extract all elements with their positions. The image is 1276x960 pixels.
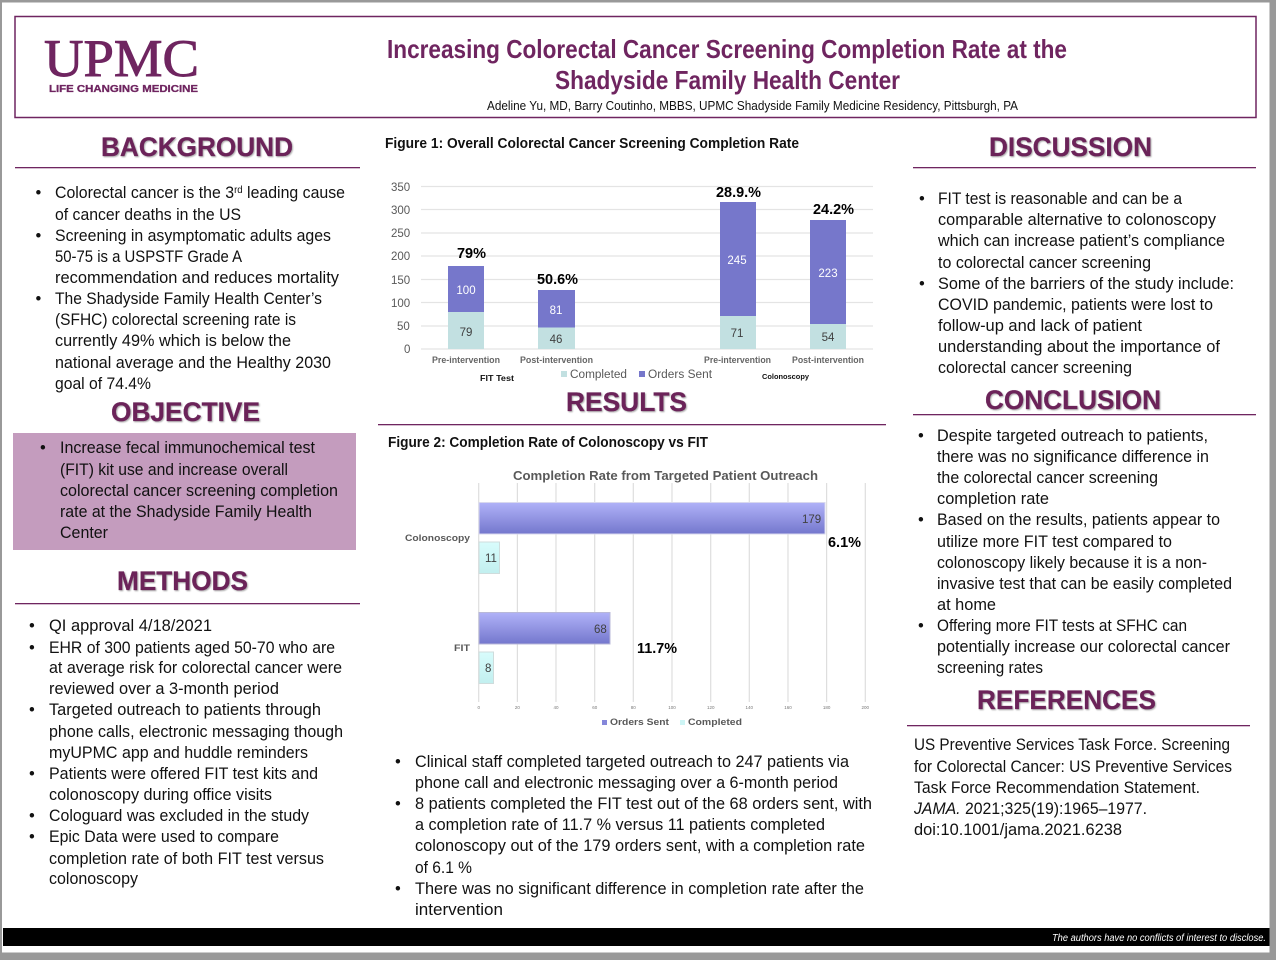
chart: figure 2 horizontal bars: 200: [862, 705, 870, 710]
text block: discussion: follow-up and lack of patient: [938, 317, 1142, 335]
heading: background: BACKGROUND: [101, 132, 293, 162]
text block: conclusion: colonoscopy likely because it is a non-: [937, 554, 1207, 572]
text block: methods: •: [29, 639, 35, 657]
chart: figure 1 stacked bars: 79%: [457, 246, 486, 262]
text block: methods: •: [29, 701, 35, 719]
chart: figure 2 horizontal bars: 180: [823, 705, 831, 710]
authors: Adeline Yu, MD, Barry Coutinho, MBBS, UPMC Shadyside Family Medicine Residency, Pittsburgh, PA: [487, 99, 1019, 113]
text block: results: colonoscopy out of the 179 orders sent, with a completion rate: [415, 837, 865, 855]
chart: figure 1 stacked bars: [391, 182, 873, 383]
text block: discussion: understanding about the importance of: [938, 338, 1220, 356]
text block: background: rd: [234, 185, 243, 196]
panel: objective: colorectal cancer screening completion: [60, 482, 338, 500]
text block: background: Screening in asymptomatic adults ages: [55, 227, 331, 245]
text block: discussion: COVID pandemic, patients were lost to: [938, 296, 1213, 314]
text block: methods: at average risk for colorectal cancer were: [49, 659, 342, 677]
text block: background: (SFHC) colorectal screening rate is: [55, 311, 296, 329]
chart: figure 2 horizontal bars: [405, 469, 870, 728]
chart: figure 2 horizontal bars: 160: [784, 705, 792, 710]
text block: conclusion: •: [918, 511, 924, 529]
chart: figure 2 horizontal bars: 140: [746, 705, 754, 710]
chart: figure 2 horizontal bars: 179: [802, 514, 821, 526]
chart: figure 1 stacked bars: 0: [404, 344, 410, 356]
text block: background: The Shadyside Family Health Center’s: [55, 290, 322, 308]
chart legend: Completed: [688, 717, 742, 728]
chart: figure 1 stacked bars: 54: [822, 332, 835, 344]
heading: conclusion: CONCLUSION: [985, 385, 1161, 415]
text block: discussion: [919, 190, 1234, 377]
chart legend: [602, 717, 742, 728]
text block: methods: colonoscopy: [49, 870, 139, 888]
chart: figure 1 stacked bars: Pre-intervention: [432, 355, 500, 365]
chart: figure 1 stacked bars: Pre-intervention: [704, 355, 771, 365]
chart: figure 1 stacked bars: 24.2%: [813, 202, 854, 218]
text block: methods: [29, 617, 343, 888]
text block: methods: •: [29, 617, 35, 635]
text block: conclusion: completion rate: [937, 490, 1049, 508]
chart: figure 1 stacked bars: 50: [397, 321, 410, 333]
text block: background: recommendation and reduces mortality: [55, 269, 340, 287]
chart: figure 1 stacked bars: 71: [731, 328, 743, 340]
text block: background: Colorectal cancer is the 3: [55, 184, 241, 202]
panel: objective: [13, 433, 356, 550]
text block: references: Task Force Recommendation Statement.: [914, 779, 1200, 797]
chart: figure 2 horizontal bars: 6.1%: [828, 535, 861, 551]
text block: methods: •: [29, 807, 35, 825]
text block: methods: reviewed over a 3-month period: [49, 680, 279, 698]
text block: methods: Targeted outreach to patients through: [49, 701, 321, 719]
text block: references: doi:10.1001/jama.2021.6238: [914, 821, 1122, 839]
text block: conclusion: screening rates: [937, 659, 1043, 677]
heading: discussion: DISCUSSION: [989, 132, 1152, 162]
text block: discussion: •: [919, 275, 925, 293]
chart: figure 1 stacked bars: 250: [391, 228, 410, 240]
panel: objective: •: [40, 439, 46, 457]
footer bar: [3, 928, 1270, 946]
chart: figure 2 horizontal bars: 8: [485, 663, 491, 675]
UPMC logo: UPMC: [44, 30, 199, 88]
text block: methods: Patients were offered FIT test kits and: [49, 765, 318, 783]
panel: objective: (FIT) kit use and increase overall: [60, 461, 288, 479]
chart: figure 2 horizontal bars: 0: [477, 705, 480, 710]
text block: conclusion: invasive test that can be easily completed: [937, 575, 1232, 593]
chart: figure 1 stacked bars: Post-intervention: [792, 355, 864, 365]
text block: references: for Colorectal Cancer: US Preventive Services: [914, 758, 1232, 776]
text block: conclusion: the colorectal cancer screening: [937, 469, 1158, 487]
text block: results: •: [395, 753, 401, 771]
header panel: [15, 16, 1256, 118]
text block: conclusion: •: [918, 427, 924, 445]
text block: results: There was no significant difference in completion rate after the: [415, 880, 864, 898]
title: Shadyside Family Health Center: [555, 65, 900, 95]
chart legend: Completed: [570, 369, 627, 381]
chart: figure 1 stacked bars: 81: [550, 305, 562, 317]
chart: figure 2 horizontal bars: 120: [707, 705, 715, 710]
text block: background: •: [36, 290, 42, 308]
text block: discussion: FIT test is reasonable and can be a: [938, 190, 1183, 208]
heading: references: REFERENCES: [977, 685, 1156, 715]
panel: objective: rate at the Shadyside Family Health: [60, 503, 312, 521]
text block: methods: QI approval 4/18/2021: [49, 617, 212, 635]
chart: figure 1 stacked bars: 100: [391, 298, 410, 310]
chart: figure 1 stacked bars: 100: [456, 285, 476, 297]
text block: conclusion: Offering more FIT tests at SFHC can: [937, 617, 1187, 635]
text block: conclusion: at home: [937, 596, 996, 614]
text block: results: phone call and electronic messaging over a 6-month period: [415, 774, 838, 792]
UPMC logo: LIFE CHANGING MEDICINE: [49, 83, 198, 95]
chart: figure 1 stacked bars: 50.6%: [537, 272, 578, 288]
chart: figure 2 horizontal bars: 11: [485, 553, 497, 565]
text block: methods: Epic Data were used to compare: [49, 828, 279, 846]
text block: discussion: which can increase patient’s compliance: [937, 232, 1225, 250]
chart: figure 2 horizontal bars: 68: [594, 624, 607, 636]
chart: figure 2 horizontal bars: 20: [515, 705, 520, 710]
text block: references: JAMA. 2021;325(19):1965–1977.: [913, 800, 1147, 818]
text block: references: [913, 736, 1232, 839]
text block: discussion: to colorectal cancer screening: [938, 254, 1151, 272]
text block: background: national average and the Healthy 2030: [55, 354, 331, 372]
panel: objective: Increase fecal immunochemical test: [60, 439, 315, 457]
text block: discussion: colorectal cancer screening: [938, 359, 1132, 377]
text block: background: •: [36, 227, 42, 245]
text block: background: goal of 74.4%: [55, 375, 151, 393]
figure 1 heading: Figure 1: Overall Colorectal Cancer Screening Completion Rate: [385, 136, 799, 152]
heading: results: RESULTS: [566, 387, 687, 417]
text block: background: 50-75 is a USPSTF Grade A: [55, 248, 242, 266]
text block: background: of cancer deaths in the US: [55, 206, 241, 224]
text block: results: Clinical staff completed targeted outreach to 247 patients via: [415, 753, 850, 771]
chart legend: [561, 369, 713, 381]
chart: figure 1 stacked bars: 300: [391, 205, 410, 217]
text block: methods: •: [29, 765, 35, 783]
chart: figure 1 stacked bars: 200: [391, 251, 410, 263]
chart: figure 2 horizontal bars: FIT: [454, 643, 470, 654]
heading: methods: METHODS: [117, 566, 248, 596]
text block: conclusion: [918, 427, 1232, 677]
chart: figure 2 horizontal bars: 100: [668, 705, 676, 710]
chart legend: Orders Sent: [610, 717, 670, 728]
chart: figure 2 horizontal bars: Colonoscopy: [405, 533, 471, 544]
text block: conclusion: Based on the results, patients appear to: [937, 511, 1220, 529]
text block: background: currently 49% which is below the: [55, 332, 291, 350]
chart: figure 1 stacked bars: FIT Test: [480, 374, 514, 383]
text block: conclusion: potentially increase our colorectal cancer: [937, 638, 1230, 656]
text block: background: leading cause: [243, 184, 345, 202]
text block: results: intervention: [415, 901, 503, 919]
chart legend: Orders Sent: [648, 369, 713, 381]
chart: figure 1 stacked bars: 46: [550, 334, 562, 346]
text block: results: [395, 753, 872, 919]
chart: figure 2 horizontal bars: 40: [553, 705, 559, 710]
text block: methods: myUPMC app and huddle reminders: [49, 744, 308, 762]
chart: figure 1 stacked bars: 28.9.%: [716, 185, 761, 201]
footer bar: The authors have no conflicts of interest to disclose.: [1052, 933, 1266, 944]
text block: background: [36, 184, 345, 393]
chart: figure 1 stacked bars: Colonoscopy: [762, 374, 809, 381]
chart: figure 2 horizontal bars: 60: [592, 705, 598, 710]
text block: conclusion: there was no significance difference in: [937, 448, 1209, 466]
figure 2 heading: Figure 2: Completion Rate of Colonoscopy vs FIT: [388, 435, 708, 451]
text block: references: US Preventive Services Task Force. Screening: [914, 736, 1230, 754]
text block: discussion: Some of the barriers of the study include:: [938, 275, 1234, 293]
title: Increasing Colorectal Cancer Screening Completion Rate at the: [387, 34, 1067, 64]
text block: methods: completion rate of both FIT test versus: [49, 850, 324, 868]
text block: results: 8 patients completed the FIT test out of the 68 orders sent, with: [415, 795, 872, 813]
text block: results: •: [395, 795, 401, 813]
chart: figure 1 stacked bars: 150: [391, 275, 410, 287]
title: [387, 34, 1067, 95]
text block: methods: Cologuard was excluded in the study: [49, 807, 310, 825]
text block: methods: phone calls, electronic messaging though: [49, 723, 343, 741]
text block: discussion: •: [919, 190, 925, 208]
text block: methods: colonoscopy during office visits: [49, 786, 272, 804]
chart: figure 2 horizontal bars: 80: [631, 705, 636, 710]
text block: conclusion: Despite targeted outreach to patients,: [937, 427, 1208, 445]
chart: figure 1 stacked bars: 350: [391, 182, 410, 194]
text block: results: •: [395, 880, 401, 898]
text block: conclusion: •: [918, 617, 924, 635]
chart: figure 1 stacked bars: 223: [818, 268, 838, 280]
panel: objective: Center: [60, 524, 108, 542]
chart: figure 2 horizontal bars: Completion Rate from Targeted Patient Outreach: [513, 469, 818, 483]
text block: conclusion: utilize more FIT test compared to: [937, 533, 1172, 551]
chart: figure 1 stacked bars: 245: [727, 255, 747, 267]
chart: figure 2 horizontal bars: 11.7%: [637, 641, 677, 657]
chart: figure 1 stacked bars: 79: [460, 327, 472, 339]
text block: discussion: comparable alternative to colonoscopy: [938, 211, 1217, 229]
text block: methods: EHR of 300 patients aged 50-70 who are: [49, 639, 335, 657]
text block: background: •: [36, 184, 42, 202]
chart: figure 1 stacked bars: Post-intervention: [520, 355, 593, 365]
heading: objective: OBJECTIVE: [111, 397, 260, 427]
text block: results: of 6.1 %: [415, 859, 472, 877]
text block: results: a completion rate of 11.7 % versus 11 patients completed: [415, 816, 825, 834]
text block: methods: •: [29, 828, 35, 846]
